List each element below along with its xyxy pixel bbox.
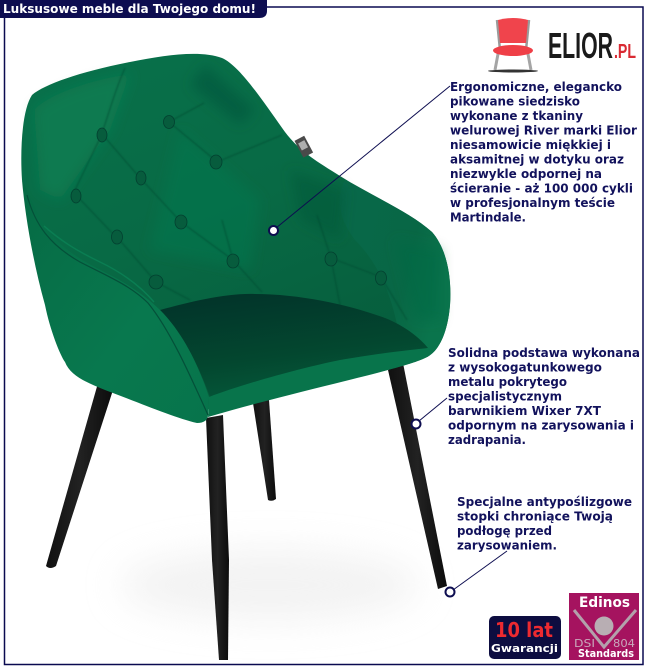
text block: base: barwnikiem Wixer 7XT — [448, 404, 602, 418]
text block: feet — [457, 495, 632, 552]
badge standards: Standards — [578, 648, 634, 660]
seat cushion — [160, 294, 428, 397]
left arm seam — [27, 195, 208, 415]
back velvet light patches — [34, 65, 440, 320]
floor shadow — [120, 550, 420, 620]
callout: feet leader — [446, 551, 507, 596]
text block: upholstery: niezwykle odpornej na — [450, 167, 602, 181]
badge caption: Gwarancji — [491, 642, 558, 655]
chair legs — [46, 363, 447, 660]
badge 804: 804 — [613, 638, 635, 650]
text block: base — [448, 346, 640, 447]
text block: upholstery: ścieranie - aż 100 000 cykli — [450, 182, 633, 196]
logo: Elior — [488, 18, 636, 72]
badge: Edinos standards — [569, 593, 639, 660]
text block: feet: Specjalne antypoślizgowe — [457, 495, 632, 509]
tufting buttons and pleats — [71, 68, 407, 320]
text block: upholstery: w profesjonalnym teście — [450, 196, 615, 210]
left arm — [22, 180, 209, 423]
text block: feet: podłogę przed — [457, 524, 552, 538]
header banner — [0, 0, 267, 18]
text block: base: Solidna podstawa wykonana — [448, 346, 640, 360]
text block: upholstery: Martindale. — [450, 210, 526, 224]
badge chevron — [574, 610, 636, 647]
callout: base leader — [412, 398, 447, 428]
badge circle — [594, 616, 614, 636]
text block: upholstery: welurowej River marki Elior — [450, 124, 637, 138]
badge title: Edinos — [579, 595, 630, 611]
text block: upholstery: wykonane z tkaniny — [450, 109, 583, 123]
text block: base: metalu pokrytego — [448, 375, 567, 389]
text block: base: z wysokogatunkowego — [448, 360, 602, 374]
seat front edge — [208, 348, 430, 417]
text block: upholstery: niesamowicie miękkiej i — [450, 138, 611, 152]
badge: 10 years warranty — [489, 616, 561, 659]
chair illustration — [21, 54, 450, 660]
text block: base: specjalistycznym — [448, 390, 562, 404]
text block: base: odpornym na zarysowania i — [448, 418, 634, 432]
icon: red chair — [488, 18, 538, 72]
fabric tag — [294, 136, 313, 158]
text block: feet: zarysowaniem. — [457, 538, 557, 552]
text block: feet: stopki chroniące Twoją — [457, 510, 613, 524]
text block: upholstery — [450, 80, 637, 224]
callout: upholstery leader — [269, 86, 450, 235]
text block: upholstery: aksamitnej w dotyku oraz — [450, 152, 624, 166]
text block: base: zadrapania. — [448, 433, 526, 447]
right arm shading — [340, 180, 450, 358]
badge DSI: DSI — [574, 638, 595, 650]
header text: Luksusowe meble dla Twojego domu! — [3, 1, 256, 16]
logo suffix: .PL — [614, 41, 636, 63]
chair back and right arm — [21, 54, 450, 410]
text block: upholstery: pikowane siedzisko — [450, 94, 580, 108]
badge number: 10 lat — [495, 618, 553, 642]
text block: upholstery: Ergonomiczne, elegancko — [450, 80, 622, 94]
